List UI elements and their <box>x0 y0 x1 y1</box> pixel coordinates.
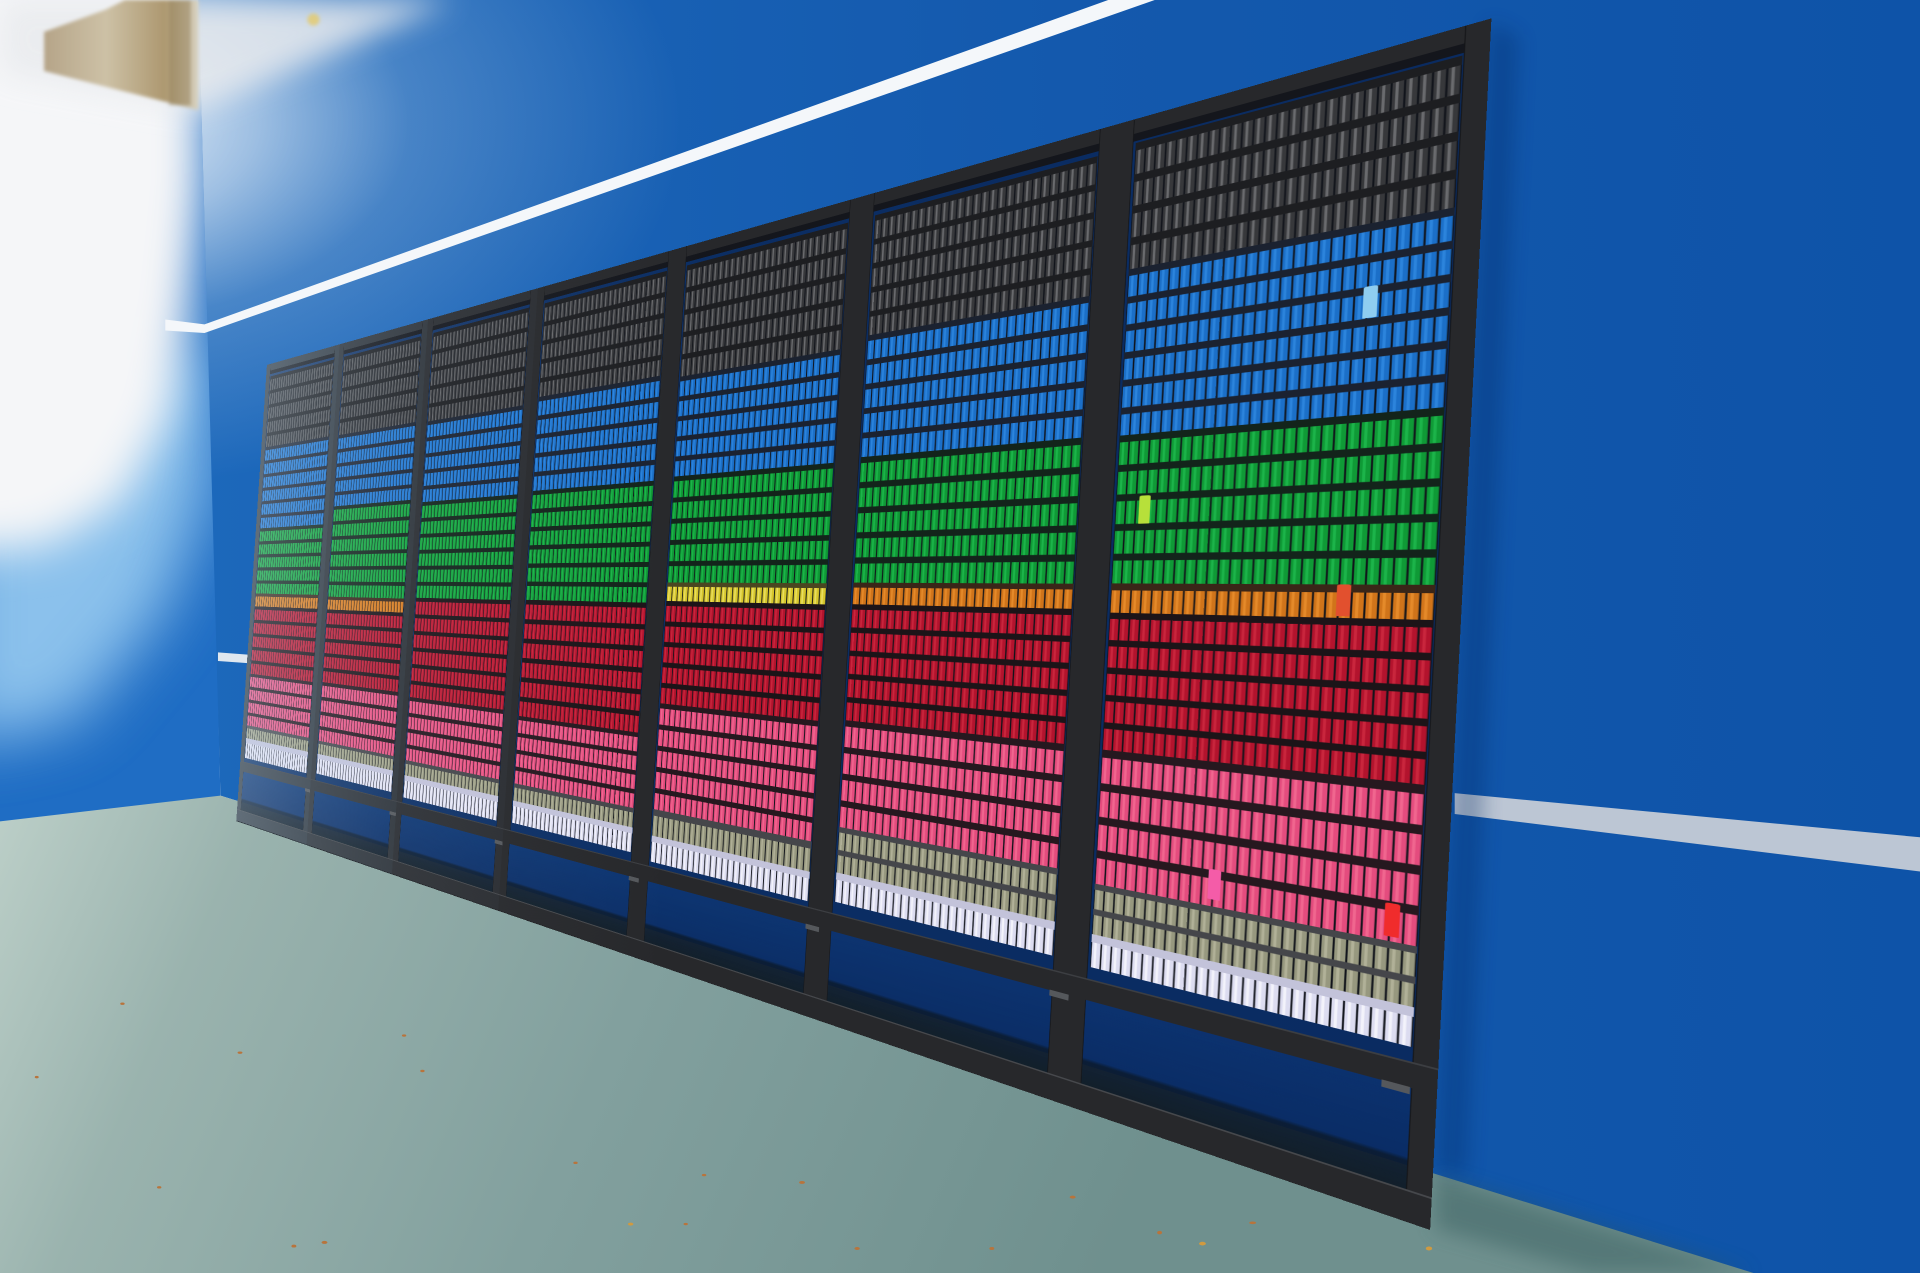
floor debris <box>35 1002 1432 1250</box>
panel 3 <box>392 288 538 911</box>
panel 7 <box>1062 18 1492 1230</box>
can rows: panel 1 <box>245 360 334 774</box>
panel 5 <box>634 196 862 1019</box>
can rows: panel 7 <box>1090 56 1463 1048</box>
floor <box>0 796 1753 1273</box>
panel 1 <box>236 344 340 845</box>
can rows: panel 4 <box>512 271 667 852</box>
left wall <box>0 0 220 822</box>
upper wall stripe <box>165 0 1155 333</box>
ceiling stain <box>44 0 320 110</box>
left stripe fragment <box>218 652 251 663</box>
frame shadow on wall <box>1435 22 1518 1175</box>
ceiling <box>0 0 453 110</box>
floor shadow beside frame <box>1435 1175 1753 1273</box>
can rows: panel 2 <box>316 336 421 792</box>
artwork: seven framed panels of spray cans <box>236 18 1492 1230</box>
can rows: panel 6 <box>834 156 1098 956</box>
lower wall stripe <box>1455 793 1920 872</box>
panel 4 <box>498 248 678 957</box>
panel 6 <box>814 124 1118 1104</box>
can rows: panel 5 <box>650 222 848 902</box>
panel 2 <box>306 320 428 874</box>
can rows: panel 3 <box>403 308 530 821</box>
